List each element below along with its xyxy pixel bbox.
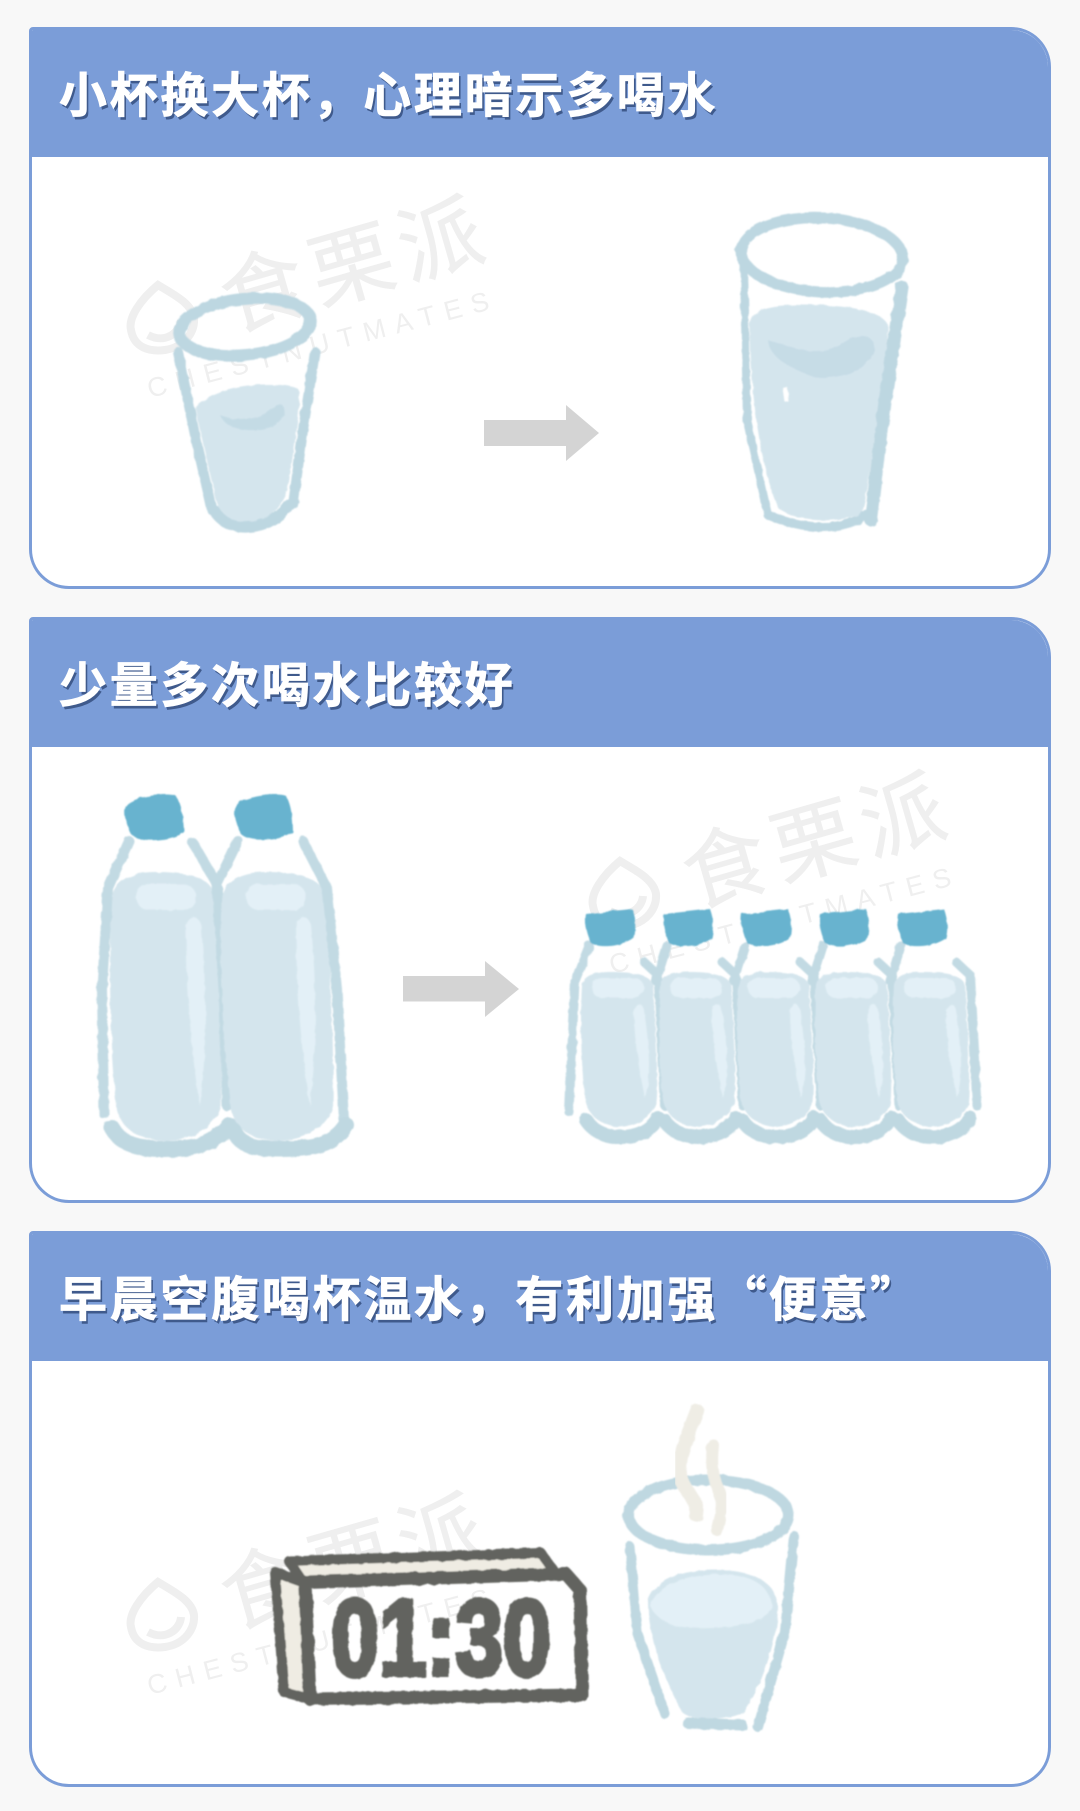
illustration area: [96, 758, 982, 1158]
clock digits: 01:30: [331, 1577, 551, 1698]
icon: five small bottles: [569, 909, 977, 1137]
watermark: 食栗派: [672, 758, 963, 924]
title: 早晨空腹喝杯温水，有利加强“便意”: [59, 1260, 921, 1330]
icon: big glass of water: [739, 214, 905, 527]
heading band: [29, 27, 1051, 157]
title: 小杯换大杯，心理暗示多喝水: [59, 56, 718, 126]
icon: steam: [680, 1411, 722, 1530]
arrow: [484, 405, 599, 461]
large bottle 2: [217, 794, 346, 1149]
small bottle 3: [734, 909, 821, 1137]
heading band: [29, 617, 1051, 747]
icon: two large bottles: [102, 794, 346, 1149]
panel: warm water in the morning: [29, 1231, 1051, 1787]
watermark: [593, 758, 963, 980]
illustration area: [126, 1404, 800, 1732]
icon: digital alarm clock: [275, 1553, 582, 1699]
watermark: CHESTNUTMATES: [144, 1583, 492, 1701]
small bottle 4: [812, 909, 899, 1137]
panel: small cup to big cup: [29, 27, 1051, 589]
panel: drink small amounts often: [29, 617, 1051, 1203]
small bottle 1: [569, 909, 665, 1137]
large bottle 1: [102, 794, 229, 1149]
small bottle 5: [890, 909, 977, 1137]
illustration area: [126, 182, 910, 534]
small bottle 2: [656, 909, 743, 1137]
watermark: 食栗派: [210, 1479, 501, 1645]
watermark: 食栗派: [210, 182, 501, 348]
icon: glass of warm water: [628, 1480, 794, 1727]
icon: small glass of water: [176, 292, 315, 527]
title: 少量多次喝水比较好: [59, 646, 515, 716]
watermark: CHESTNUTMATES: [144, 286, 492, 404]
watermark: [131, 182, 501, 404]
watermark: CHESTNUTMATES: [606, 862, 954, 980]
arrow: [403, 961, 519, 1017]
heading band: [29, 1231, 1051, 1361]
watermark: [131, 1479, 501, 1701]
